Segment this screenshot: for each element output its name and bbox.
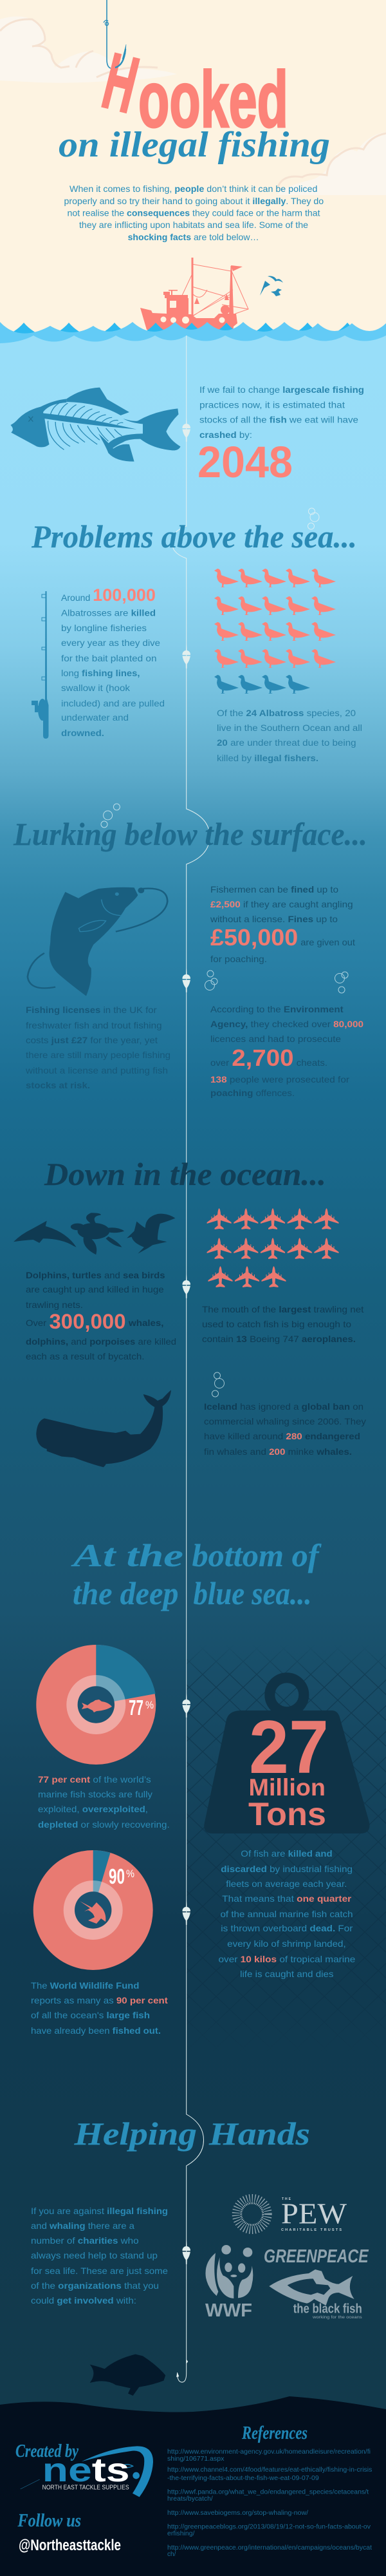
licences text: freshwater fish and trout fishing bbox=[26, 1020, 162, 1030]
fines text: Fishermen can be fined up to bbox=[210, 884, 338, 895]
heading: Down in the ocean: Down in the ocean... bbox=[44, 1156, 326, 1192]
WWF stat text: The World Wildlife Fund bbox=[31, 1980, 139, 1991]
icons: dolphin, turtle, sea bird bbox=[14, 1213, 175, 1255]
licences text: there are still many people fishing bbox=[26, 1050, 170, 1060]
heading: References: References bbox=[241, 2423, 308, 2443]
social handle: @Northeasttackle bbox=[19, 2537, 121, 2554]
charities text: for sea life. These are just some bbox=[31, 2266, 168, 2276]
panel: albatross left bbox=[32, 585, 165, 739]
chart: 90% donut bbox=[33, 1850, 153, 1970]
bycatch text: dolphins, and porpoises are killed bbox=[26, 1336, 176, 1347]
albatross text: every year as they dive bbox=[61, 638, 160, 648]
charities text: of the organizations that you bbox=[31, 2280, 159, 2291]
heading: Helping Hands: Helping bbox=[73, 2116, 197, 2152]
net pattern bbox=[187, 1658, 386, 1908]
heading: Follow us: Follow us bbox=[17, 2511, 81, 2531]
logo: the black fish: the black fish bbox=[293, 2302, 362, 2316]
prosecution text: According to the Environment bbox=[210, 1004, 344, 1014]
reference links bbox=[167, 2448, 372, 2558]
prosecution text: 138 people were prosecuted for bbox=[210, 1074, 349, 1084]
reference links: http://www.channel4.com/4food/features/eat-ethically/fishing-in-crisis bbox=[167, 2466, 372, 2474]
trawling text bbox=[202, 1304, 364, 1344]
icon: perch bbox=[82, 1700, 112, 1712]
albatross text: for the bait planted on bbox=[61, 653, 157, 663]
reference links: ch/ bbox=[167, 2550, 176, 2558]
icon: dark fish near hook bbox=[90, 2354, 165, 2396]
panel: trawling net right bbox=[202, 1208, 366, 1457]
species text: live in the Southern Ocean and all bbox=[217, 723, 362, 733]
discard text bbox=[219, 1848, 356, 1979]
heading: At the bottom of the deep blue sea: bottom of bbox=[192, 1537, 322, 1573]
icon: sperm whale bbox=[36, 1390, 171, 1467]
weight label bbox=[248, 1705, 329, 1832]
stat text bbox=[38, 1774, 170, 1830]
heading: Lurking below the surface: Lurking below the surface... bbox=[13, 816, 367, 852]
heading: Helping Hands bbox=[73, 2116, 310, 2152]
discard text: That means that one quarter bbox=[222, 1893, 352, 1904]
albatross text: by longline fisheries bbox=[61, 623, 147, 633]
icon: fishing boat bbox=[140, 258, 248, 334]
logo: The Pew Charitable Trusts bbox=[236, 2197, 347, 2232]
charities text bbox=[31, 2206, 168, 2306]
charities text: and whaling there are a bbox=[31, 2221, 134, 2231]
panel: bycatch left bbox=[14, 1213, 176, 1467]
intro text: properly and so try their hand to going about it illegally. They do bbox=[64, 196, 324, 206]
albatross text: long fishing lines, bbox=[61, 668, 140, 678]
label: 77%: 77 bbox=[129, 1696, 143, 1719]
icon: hook tip bbox=[176, 2360, 188, 2377]
reference links: shing/106771.aspx bbox=[167, 2455, 225, 2463]
fishing line with arcs and hook bbox=[172, 336, 210, 2382]
albatross text: Albatrosses are killed bbox=[61, 608, 156, 618]
prosecution text: Agency, they checked over 80,000 bbox=[210, 1019, 363, 1029]
charities text: could get involved with: bbox=[31, 2295, 136, 2306]
discard text: of the annual marine fish catch bbox=[220, 1909, 353, 1919]
reference links: http://greenpeaceblogs.org/2013/08/19/12-not-so-fun-facts-about-ov bbox=[167, 2523, 371, 2531]
reference links: http://wwf.panda.org/what_we_do/endangered_species/cetaceans/t bbox=[167, 2488, 369, 2496]
logo: NETS North East Tackle Supplies: NORTH EAST TACKLE SUPPLIES bbox=[42, 2485, 129, 2492]
licences text: Fishing licenses in the UK for bbox=[26, 1005, 157, 1015]
fact text: If we fail to change largescale fishing bbox=[199, 384, 364, 395]
title word Hooked: ooked bbox=[138, 56, 288, 144]
heading: At the bottom of the deep blue sea: At the bbox=[71, 1537, 183, 1573]
fact text bbox=[199, 384, 364, 440]
heading: At the bottom of the deep blue sea: the deep bbox=[73, 1575, 179, 1611]
chart: 77% donut bbox=[36, 1645, 156, 1765]
WWF stat text: have already been fished out. bbox=[31, 2025, 161, 2036]
Iceland whaling text bbox=[204, 1401, 366, 1457]
bycatch text: each as a result of bycatch. bbox=[26, 1351, 144, 1361]
panel: albatross right bbox=[214, 569, 362, 763]
discard text: fleets on average each year. bbox=[226, 1879, 347, 1889]
WWF stat text: reports as many as 90 per cent bbox=[31, 1995, 168, 2005]
pictogram: 13 aeroplanes bbox=[207, 1208, 338, 1287]
label: 77%: % bbox=[145, 1699, 154, 1711]
heading: Helping Hands: Hands bbox=[208, 2116, 310, 2152]
fines text: £2,500 if they are caught angling bbox=[210, 899, 353, 909]
icon: marlin bbox=[80, 1901, 106, 1924]
logo: The Pew Charitable Trusts: CHARITABLE TRUSTS bbox=[281, 2228, 342, 2232]
Iceland whaling text: fin whales and 200 minke whales. bbox=[204, 1446, 352, 1457]
title word Hooked: H bbox=[95, 37, 146, 130]
fines text: for poaching. bbox=[210, 954, 267, 964]
title subtitle script: on illegal fishing bbox=[59, 125, 330, 165]
reference links: -the-terrifying-facts-about-the-fish-we-eat-09-07-09 bbox=[167, 2474, 319, 2482]
prosecution text: licences and had to prosecute bbox=[210, 1034, 341, 1044]
icon: hooked carp bbox=[28, 887, 167, 996]
fines text: £50,000 are given out bbox=[210, 924, 355, 951]
species text bbox=[217, 708, 362, 763]
species text: 20 are under threat due to being bbox=[217, 737, 356, 748]
Iceland whaling text: have killed around 280 endangered bbox=[204, 1431, 360, 1441]
discard text: over 10 kilos of tropical marine bbox=[219, 1954, 356, 1964]
discard text: life is caught and dies bbox=[240, 1969, 333, 1979]
title word Hooked bbox=[95, 37, 288, 144]
panel: 2048 fact bbox=[10, 384, 364, 487]
title: Hooked on illegal fishing bbox=[59, 37, 330, 165]
footer background wave bbox=[0, 2396, 386, 2576]
cloud right bbox=[277, 132, 386, 195]
trawling text: contain 13 Boeing 747 aeroplanes. bbox=[202, 1334, 356, 1344]
panel: 27 million tons bbox=[204, 1678, 369, 1979]
big number 2048: 2048 bbox=[198, 437, 293, 487]
heading: At the bottom of the deep blue sea: blue sea... bbox=[193, 1575, 311, 1611]
fact text: stocks of all the fish we eat will have bbox=[199, 415, 358, 425]
intro text: When it comes to fishing, people don’t think it can be policed bbox=[69, 184, 317, 194]
logo: NETS North East Tackle Supplies bbox=[21, 2446, 153, 2497]
Iceland whaling text: commercial whaling since 2006. They bbox=[204, 1416, 366, 1426]
stat text: marine fish stocks are fully bbox=[38, 1789, 152, 1799]
waves: dark crests bbox=[8, 323, 363, 335]
albatross text: Around 100,000 bbox=[61, 585, 156, 605]
species text: killed by illegal fishers. bbox=[217, 753, 318, 763]
label: 90%: 90 bbox=[109, 1864, 125, 1888]
charities text: If you are against illegal fishing bbox=[31, 2206, 168, 2216]
bubbles: lurking bbox=[101, 804, 120, 828]
intro text: shocking facts are told below… bbox=[128, 232, 259, 242]
icon: fishing rod bbox=[32, 591, 49, 739]
albatross text: underwater and bbox=[61, 712, 129, 723]
fact text: practices now, it is estimated that bbox=[199, 399, 345, 410]
bycatch text bbox=[26, 1270, 176, 1361]
bycatch text: are caught up and killed in huge bbox=[26, 1284, 164, 1294]
reference links: http://www.environment-agency.gov.uk/homeandleisure/recreation/fi bbox=[167, 2448, 371, 2456]
discard text: is thrown overboard dead. For bbox=[221, 1923, 353, 1933]
licences text: costs just £27 for the year, yet bbox=[26, 1035, 158, 1045]
bubbles: trawling bbox=[212, 1372, 224, 1397]
reference links: erfishing/ bbox=[167, 2530, 195, 2537]
albatross text: drowned. bbox=[61, 728, 104, 738]
cloud left bbox=[0, 16, 177, 83]
icon: weight bbox=[204, 1678, 369, 1833]
charities text: always need help to stand up bbox=[31, 2250, 158, 2260]
species text: Of the 24 Albatross species, 20 bbox=[217, 708, 356, 718]
licences text: stocks at risk. bbox=[26, 1080, 90, 1090]
footer panel bbox=[0, 2396, 386, 2576]
albatross text: swallow it (hook bbox=[61, 683, 131, 693]
fines text bbox=[210, 884, 355, 964]
heading: Created by: Created by bbox=[15, 2441, 78, 2461]
charities text: number of charities who bbox=[31, 2235, 139, 2246]
stat text: exploited, overexploited , bbox=[38, 1804, 148, 1814]
logo: the black fish bbox=[269, 2269, 363, 2320]
prosecution text bbox=[210, 1004, 363, 1098]
logo: the black fish: working for the oceans bbox=[312, 2315, 363, 2320]
discard text: Of fish are killed and bbox=[241, 1848, 333, 1859]
prosecution text: poaching offences. bbox=[210, 1088, 295, 1098]
reference links: hreats/bycatch/ bbox=[167, 2495, 213, 2503]
intro text: not realise the consequences they could face or the harm that bbox=[67, 207, 320, 218]
prosecution text: over 2,700 cheats. bbox=[210, 1045, 327, 1071]
weight label: 27 bbox=[249, 1705, 329, 1789]
background: cream sky bbox=[0, 0, 386, 348]
logo: The Pew Charitable Trusts: PEW bbox=[281, 2198, 347, 2230]
Iceland whaling text: Iceland has ignored a global ban on bbox=[204, 1401, 363, 1412]
bubbles: fines bbox=[205, 971, 348, 993]
stat text: 77 per cent of the world’s bbox=[38, 1774, 151, 1785]
heading: Problems above the sea: Problems above the sea... bbox=[31, 518, 357, 554]
icon: fishing hook at top bbox=[104, 0, 126, 68]
bycatch text: Dolphins, turtles and sea birds bbox=[26, 1270, 165, 1280]
icon: birds bbox=[260, 276, 283, 296]
discard text: discarded by industrial fishing bbox=[221, 1864, 353, 1874]
licences text: without a license and putting fish bbox=[25, 1065, 168, 1075]
panel: 90 per cent bbox=[31, 1850, 168, 2036]
logo: NETS North East Tackle Supplies: ne ts bbox=[42, 2452, 130, 2489]
panel: licences left bbox=[25, 887, 170, 1090]
discard text: every kilo of shrimp landed, bbox=[227, 1938, 346, 1949]
logo: WWF panda: WWF bbox=[205, 2300, 252, 2321]
intro text: they are inflicting upon habitats and sea life. Some of the bbox=[79, 220, 308, 230]
WWF stat text bbox=[31, 1980, 168, 2036]
floats on line bbox=[183, 415, 190, 2264]
WWF stat text: of all the ocean's large fish bbox=[31, 2010, 150, 2020]
bycatch text: whales, bbox=[128, 1318, 163, 1328]
weight label: Million bbox=[248, 1774, 326, 1801]
licences text bbox=[25, 1005, 170, 1090]
trawling text: used to catch fish is big enough to bbox=[202, 1319, 351, 1329]
albatross text: included) and are pulled bbox=[61, 698, 165, 708]
panel: 77 per cent bbox=[36, 1645, 170, 1830]
label: 90%: % bbox=[126, 1868, 134, 1880]
weight label: Tons bbox=[248, 1796, 326, 1832]
trawling text: The mouth of the largest trawling net bbox=[202, 1304, 364, 1314]
logo: WWF panda bbox=[205, 2245, 253, 2321]
logo: The Pew Charitable Trusts: THE bbox=[282, 2197, 291, 2201]
bycatch text: Over bbox=[26, 1318, 46, 1328]
fact text: crashed by: bbox=[199, 430, 252, 440]
pictogram: 24 albatrosses bbox=[214, 569, 336, 694]
icon: fish skeleton bbox=[10, 388, 181, 462]
reference links: http://www.savebiogems.org/stop-whaling-now/ bbox=[167, 2509, 308, 2517]
waves: mid layer bbox=[0, 322, 386, 348]
bycatch text: 300,000 bbox=[49, 1310, 126, 1333]
heading: At the bottom of the deep blue sea bbox=[71, 1537, 322, 1611]
albatross text bbox=[61, 585, 165, 738]
bycatch text: trawling nets. bbox=[26, 1300, 83, 1310]
bubbles: above the sea bbox=[308, 508, 319, 529]
intro text bbox=[64, 184, 324, 242]
stat text: depleted or slowly recovering. bbox=[38, 1819, 170, 1830]
reference links: http://www.greenpeace.org/international/en/campaigns/oceans/bycat bbox=[167, 2544, 372, 2552]
fines text: without a license. Fines up to bbox=[210, 914, 338, 924]
panel: fines right bbox=[205, 884, 363, 1098]
